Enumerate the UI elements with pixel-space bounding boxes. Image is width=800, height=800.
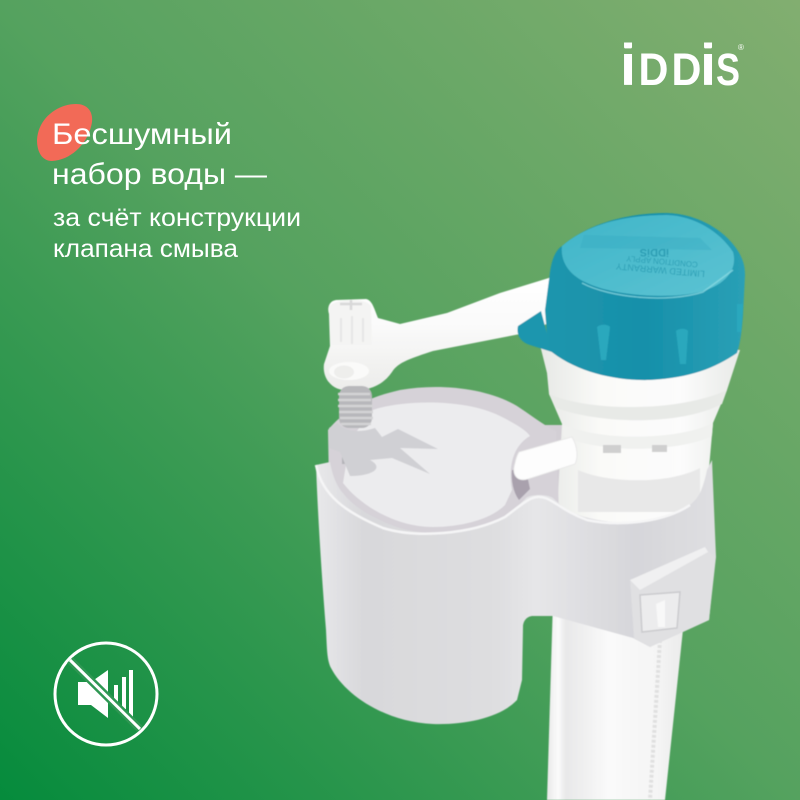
logo: IDDIS: D — [638, 45, 668, 95]
cup notch — [512, 470, 530, 500]
spring — [338, 386, 373, 464]
cup interior behind valve body — [540, 425, 708, 530]
logo: IDDIS: i — [620, 33, 636, 98]
subheading: за счёт конструкции — [53, 204, 301, 232]
subheading: клапана смыва — [53, 235, 238, 263]
lever arm — [324, 277, 552, 390]
lever screw head — [329, 300, 372, 380]
logo: IDDIS: S — [716, 44, 740, 95]
heading: набор воды — — [52, 158, 267, 191]
product photo: fill valve — [316, 213, 745, 800]
heading: Бесшумный — [52, 118, 232, 151]
cup rim highlight — [316, 465, 690, 534]
logo: IDDIS — [624, 42, 744, 86]
bracket — [329, 423, 438, 476]
heading — [52, 118, 267, 191]
cap: CONDITION APPLY — [625, 254, 698, 269]
logo: IDDIS: D — [672, 45, 701, 95]
cap — [518, 213, 745, 380]
cup front band — [316, 460, 716, 724]
cup rear wall — [328, 387, 560, 540]
subheading — [53, 204, 301, 263]
logo: IDDIS: ® — [738, 43, 744, 52]
nozzle — [514, 437, 577, 480]
cap: iDDiS — [640, 246, 669, 258]
cap: LIMITED WARRANTY — [615, 261, 705, 279]
valve body — [540, 345, 740, 530]
float disc — [343, 402, 530, 527]
clip — [630, 547, 715, 647]
icon: silent mode — [55, 643, 157, 745]
tube ribbed edge — [650, 640, 660, 800]
accent blob — [37, 104, 92, 161]
logo: IDDIS: i — [700, 33, 716, 98]
tube — [547, 600, 684, 800]
